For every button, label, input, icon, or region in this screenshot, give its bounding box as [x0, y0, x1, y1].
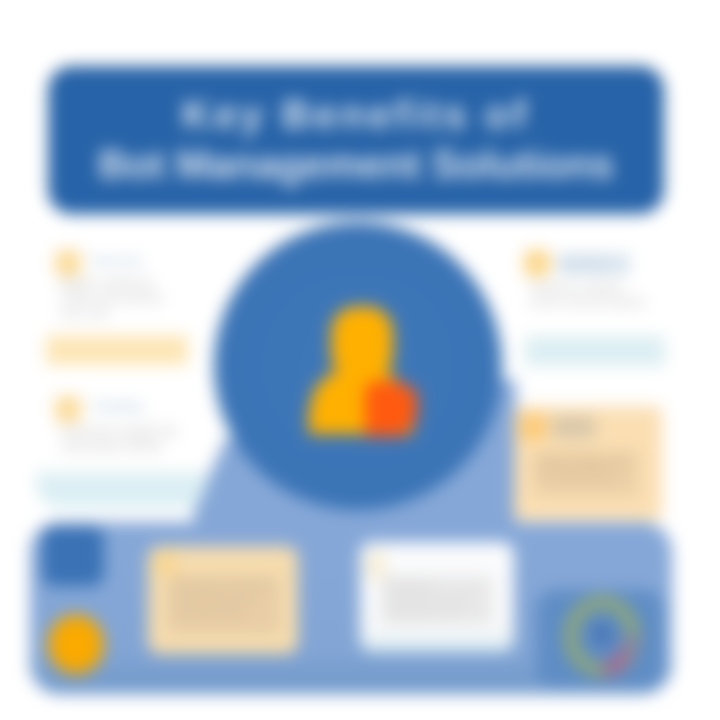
card heading: Savings [558, 255, 608, 270]
icon: card marker [524, 250, 550, 276]
icon: card marker [366, 550, 386, 580]
card: middle left [45, 386, 178, 453]
card text: Real-time insight into automated activity [61, 424, 178, 453]
card heading [552, 416, 596, 440]
connector behind central circle [190, 380, 520, 540]
card: right amber [514, 406, 662, 520]
icon: person with shield [296, 294, 430, 449]
highlight strip: left amber [46, 335, 188, 365]
title banner [48, 66, 664, 214]
card heading [558, 254, 630, 274]
icon: card marker [55, 250, 81, 276]
card text: Reduces wasted server and ad spend [530, 280, 644, 309]
card text [534, 452, 638, 496]
highlight strip: right teal [525, 336, 665, 366]
icon: card marker [55, 396, 81, 422]
central circle [214, 222, 502, 510]
tile: dark blue square [42, 526, 104, 586]
card: top left [45, 240, 164, 320]
highlight strip: left teal [36, 472, 206, 508]
icon: amber circle [48, 614, 104, 674]
card text: Supports compliance and customer trust [382, 576, 470, 620]
card: bottom amber [148, 546, 298, 654]
card text: Improves accuracy of analytics and reporting data [168, 576, 273, 620]
card text: Blocks malicious traffic and protects your site [61, 276, 164, 320]
card heading: Security [91, 253, 142, 268]
card heading: Visibility [91, 399, 144, 414]
icon: card marker [154, 552, 176, 574]
panel: darker corner behind ring [536, 590, 664, 688]
icon: card marker [520, 414, 546, 440]
panel: bottom band [30, 522, 672, 694]
card: top right [513, 240, 644, 309]
card heading: Speed [552, 417, 591, 432]
card text: Keeps pages fast for real visitors [534, 452, 631, 481]
title [88, 89, 622, 196]
card: bottom white [360, 542, 514, 652]
title: Bot Management Solutions [98, 143, 614, 187]
icon: multicolour ring [556, 586, 648, 686]
title: Key Benefits of [182, 93, 530, 137]
